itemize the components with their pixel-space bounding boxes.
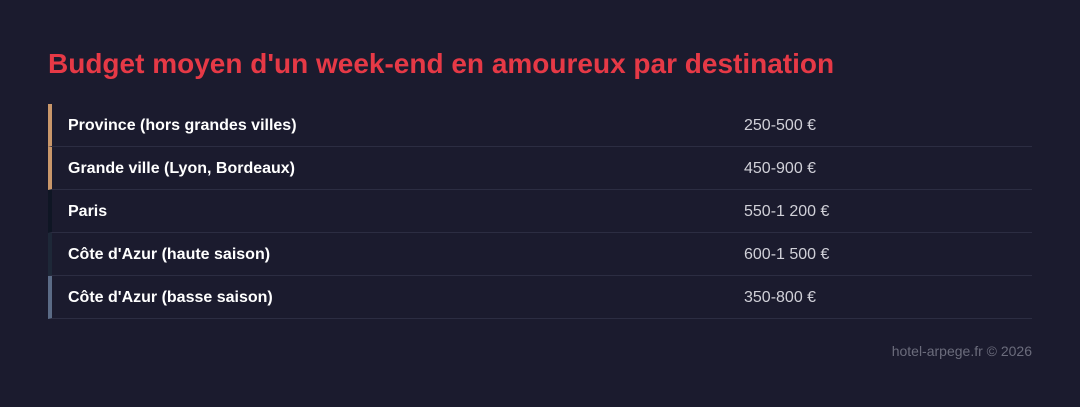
table: budgets (48, 104, 1032, 319)
row: province (48, 104, 1032, 147)
row: grande ville: 450-900 € (744, 160, 816, 177)
row: province: 250-500 € (744, 117, 816, 134)
row: cote d'azur basse: Côte d'Azur (basse saison) (68, 289, 273, 306)
row: cote d'azur basse (48, 276, 1032, 319)
row: cote d'azur haute: Côte d'Azur (haute saison) (68, 246, 270, 263)
row: cote d'azur basse: 350-800 € (744, 289, 816, 306)
row: paris (48, 190, 1032, 233)
row: province: Province (hors grandes villes) (68, 117, 297, 134)
row: cote d'azur haute: 600-1 500 € (744, 246, 829, 263)
row: grande ville: Grande ville (Lyon, Bordeaux) (68, 160, 295, 177)
title: Budget moyen d'un week-end en amoureux par destination (48, 48, 834, 79)
footer credit: hotel-arpege.fr © 2026 (892, 343, 1032, 359)
row: paris: 550-1 200 € (744, 203, 829, 220)
row: grande ville (48, 147, 1032, 190)
row: paris: Paris (68, 203, 107, 220)
row: cote d'azur haute (48, 233, 1032, 276)
